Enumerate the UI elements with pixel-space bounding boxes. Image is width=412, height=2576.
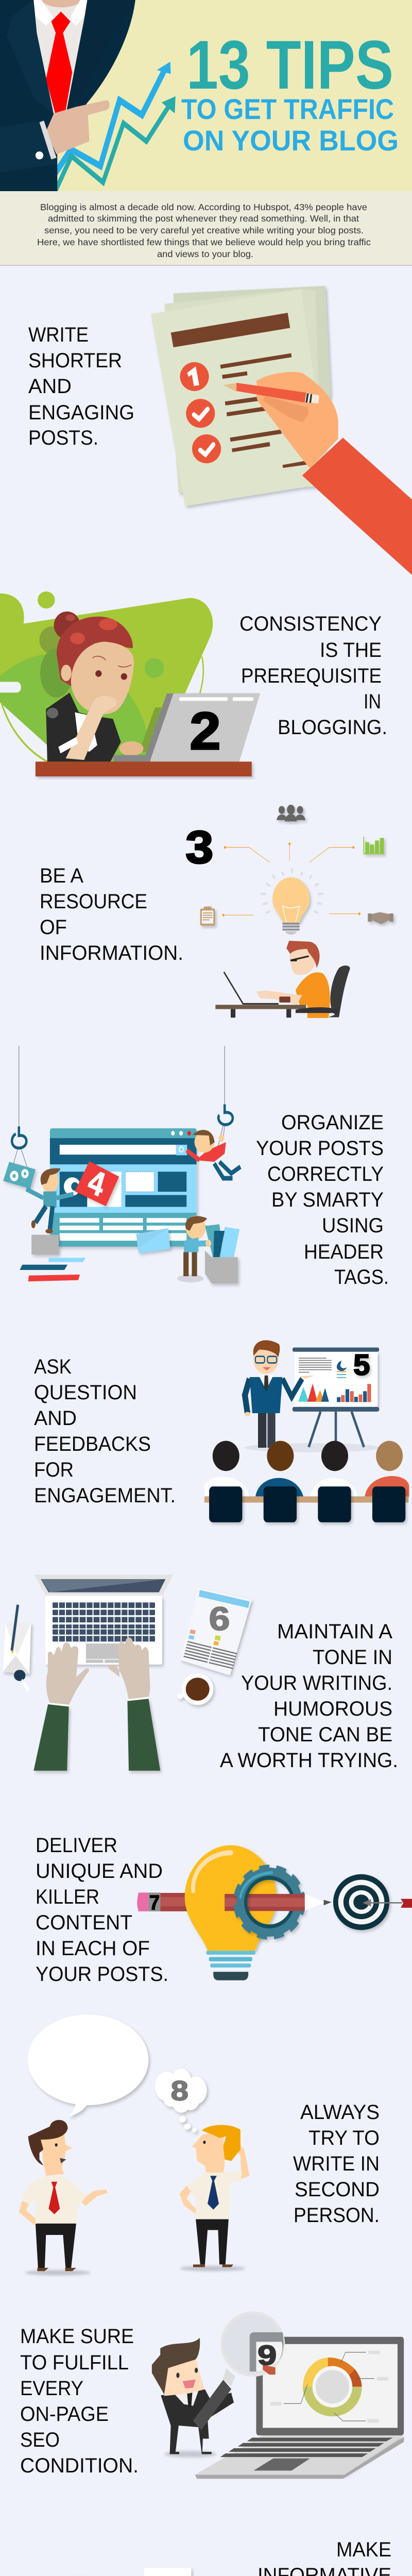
illustration: pencil through bulb and gear toward target: [137, 1845, 412, 1980]
intro paragraph: Blogging is almost a decade old now. According to Hubspot, 43% people have: [40, 202, 367, 212]
text: tip 9: EVERY: [20, 2377, 83, 2400]
text: tip 6: TONE CAN BE: [258, 1723, 392, 1746]
text: tip 9: CONDITION.: [20, 2454, 139, 2477]
text: tip 6: HUMOROUS: [273, 1698, 392, 1720]
text: tip 5: [34, 1355, 176, 1507]
magnifying glass with number 9: [197, 2313, 284, 2426]
icon: clipboard: [200, 907, 215, 926]
text: tip 4: ORGANIZE: [281, 1111, 384, 1134]
gear: [236, 1868, 303, 1937]
red tilted number card: 4: [84, 1161, 109, 1205]
left hand: [46, 1642, 89, 1705]
envelope, pencil, key: [3, 1605, 31, 1692]
left worker: [26, 1168, 74, 1233]
text: tip 1: WRITE: [28, 324, 89, 346]
text: tip 4: USING: [322, 1214, 384, 1237]
hanging worker: [186, 1125, 241, 1178]
text: tip 3: [40, 865, 183, 964]
text: tip 2: BLOGGING.: [278, 716, 387, 739]
panel: tip 1: [28, 286, 412, 575]
text: tip 2: CONSISTENCY: [239, 613, 382, 635]
intro paragraph: admitted to skimming the post whenever they read something. Well, in that: [48, 213, 359, 224]
panel: tip 7: [36, 1834, 412, 1986]
left man talking: [19, 2120, 108, 2275]
text: tip 2: IN: [364, 690, 381, 713]
text: tip 8: TRY TO: [308, 2127, 380, 2149]
illustration: businessman inspecting laptop with magnifier: [152, 2313, 404, 2479]
text: tip 9: [20, 2325, 139, 2477]
text: tip 9: SEO: [20, 2429, 60, 2451]
newspaper with number 6: 6: [209, 1601, 230, 1637]
text: tip 5: AND: [34, 1407, 77, 1430]
intro paragraph: [37, 202, 371, 259]
panel: intro text band: [0, 191, 412, 266]
text: tip 7: DELIVER: [36, 1834, 117, 1857]
text: tip 4: HEADER: [304, 1241, 384, 1263]
text: tip 7: YOUR POSTS.: [36, 1963, 168, 1986]
text: tip 8: [293, 2101, 380, 2227]
text: tip 3: BE A: [40, 865, 83, 887]
number 2: 2: [190, 701, 221, 760]
text: tip 7: CONTENT: [36, 1911, 132, 1934]
illustration: pencil through bulb and gear toward target: 7: [149, 1891, 160, 1914]
text: tip 8: PERSON.: [294, 2204, 380, 2227]
illustration: typing on laptop from above: [3, 1574, 252, 1771]
panel: tip 2: [0, 591, 387, 776]
right man thinking: [179, 2125, 250, 2271]
intro paragraph: and views to your blog.: [157, 249, 253, 259]
text: tip 5: FEEDBACKS: [34, 1433, 151, 1455]
text: tip 1: AND: [28, 375, 72, 398]
subtitle: on your blog: ON YOUR BLOG: [183, 124, 399, 157]
text: tip 10: [207, 2538, 397, 2576]
panel: tip 9: [20, 2313, 404, 2479]
audience: [204, 1441, 409, 1522]
text: tip 9: ON-PAGE: [20, 2403, 109, 2426]
speech bubble: [28, 2014, 148, 2116]
text: tip 9: MAKE SURE: [20, 2325, 134, 2348]
icon: handshake: [368, 912, 393, 924]
text: tip 3: INFORMATION.: [40, 942, 183, 964]
text: tip 6: A WORTH TRYING.: [220, 1749, 398, 1772]
illustration: businessman pointing at growth arrows: [0, 0, 176, 197]
text: tip 1: ENGAGING: [28, 401, 134, 424]
text: tip 4: [256, 1111, 389, 1289]
icon: people: [277, 805, 305, 821]
thought bubble with number 8: 8: [171, 2076, 188, 2107]
text: tip 5: QUESTION: [34, 1381, 137, 1404]
thought bubble with number 8: [155, 2069, 207, 2132]
text: tip 6: MAINTAIN A: [277, 1620, 392, 1643]
hook and gear sign: [3, 1126, 36, 1189]
text: tip 2: IS THE: [320, 639, 382, 662]
panel: tip 5: [34, 1340, 409, 1522]
illustration: two men talking and thinking: [19, 2014, 250, 2275]
box worker: [177, 1216, 239, 1283]
presenter: [245, 1340, 315, 1448]
text: tip 10: MAKE: [336, 2538, 391, 2561]
text: tip 7: IN EACH OF: [36, 1937, 150, 1960]
panel: tip 8: [19, 2014, 380, 2275]
text: tip 1: [28, 324, 134, 449]
illustration: presenter with board and audience: [204, 1340, 409, 1522]
text: tip 7: KILLER: [36, 1886, 99, 1908]
text: tip 4: CORRECTLY: [267, 1163, 384, 1185]
comment cards: [3, 2568, 249, 2576]
text: tip 5: ASK: [34, 1355, 72, 1378]
red tilted number card: [75, 1161, 119, 1206]
text: tip 3: OF: [40, 916, 67, 939]
icon: bar chart: [364, 837, 384, 854]
panel: tip 3: [40, 805, 393, 1018]
panel: tip 10: [3, 2538, 397, 2576]
panel: tip 6: [3, 1574, 398, 1772]
text: tip 7: [36, 1834, 168, 1986]
text: tip 2: PREREQUISITE: [241, 665, 382, 687]
text: tip 4: BY SMARTY: [271, 1189, 384, 1211]
text: tip 4: TAGS.: [334, 1266, 389, 1289]
man at laptop: [215, 941, 350, 1018]
text: tip 6: [220, 1620, 398, 1772]
illustration: woman thinking at laptop: [0, 591, 260, 776]
laptop: [195, 2337, 404, 2479]
text: tip 8: ALWAYS: [300, 2101, 380, 2124]
number 5: 5: [353, 1349, 370, 1381]
text: tip 7: UNIQUE AND: [36, 1860, 163, 1883]
text: tip 5: FOR: [34, 1459, 74, 1481]
panel: tip 4: [3, 1046, 389, 1289]
number 3: 3: [185, 822, 213, 873]
text: tip 1: SHORTER: [28, 349, 122, 372]
target with arrow: [333, 1874, 412, 1930]
text: tip 5: ENGAGEMENT.: [34, 1484, 176, 1507]
text: tip 1: POSTS.: [28, 427, 98, 449]
businessman: [152, 2338, 234, 2458]
illustration: monitor with social comment cards: [3, 2568, 249, 2576]
illustration: checklist paper and hand with pencil: [151, 286, 412, 575]
right hand: [108, 1637, 150, 1700]
text: tip 4: YOUR POSTS: [256, 1137, 384, 1160]
intro paragraph: sense, you need to be very careful yet creative while writing your blog posts.: [44, 225, 364, 235]
text: tip 8: SECOND: [295, 2178, 380, 2201]
text: tip 2: [239, 613, 387, 739]
coffee cup: [177, 1673, 213, 1705]
magnifying glass with number 9: 9: [258, 2340, 277, 2371]
text: tip 8: WRITE IN: [293, 2153, 380, 2175]
panel: header banner: [0, 0, 412, 197]
text: tip 9: TO FULFILL: [20, 2351, 129, 2374]
donut chart: [303, 2358, 362, 2416]
illustration: team building a web page: [3, 1046, 241, 1283]
newspaper with number 6: [180, 1588, 252, 1675]
text: tip 3: RESOURCE: [40, 890, 147, 913]
text: tip 6: TONE IN: [313, 1646, 392, 1669]
intro paragraph: Here, we have shortlisted few things that we believe would help you bring traffic: [37, 237, 371, 247]
text: tip 6: YOUR WRITING.: [241, 1672, 392, 1694]
illustration: idea bulb with icons and man at laptop: [185, 805, 393, 1018]
icon: light bulb: [262, 870, 323, 935]
